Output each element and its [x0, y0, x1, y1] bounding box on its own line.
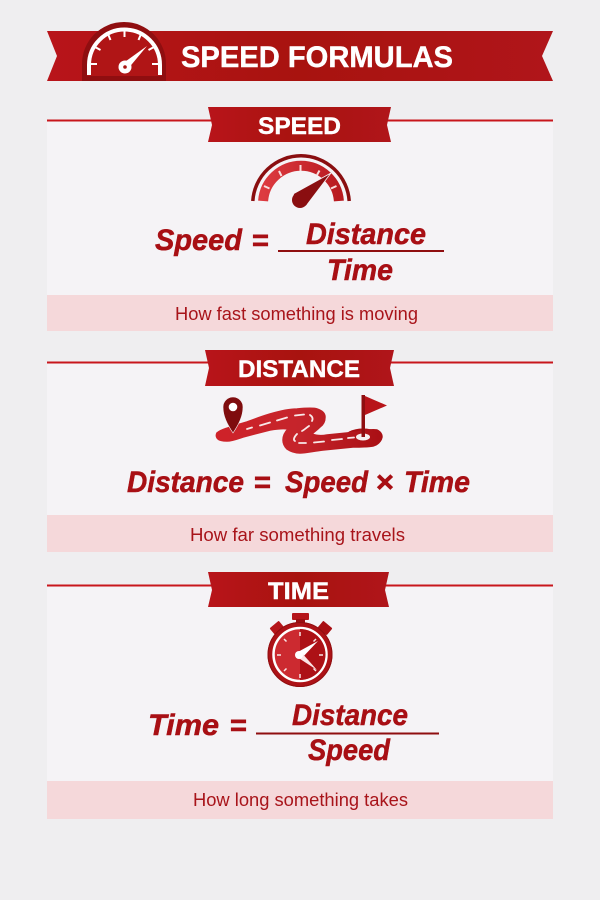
formula: time: Time [148, 709, 219, 742]
formula: time: Speed [308, 734, 391, 767]
formula: time: = [230, 709, 247, 742]
formula: speed: Distance [306, 218, 426, 251]
panel: time [47, 572, 553, 781]
heading: speed: SPEED [258, 113, 341, 140]
icon: winding road with pin and flag [216, 395, 387, 453]
formula: speed: Time [327, 254, 393, 287]
heading: distance: DISTANCE [238, 356, 360, 383]
formula: distance: = [254, 466, 271, 499]
caption: speed: How fast something is moving [175, 304, 418, 324]
formula: speed [155, 218, 444, 287]
caption: speed [47, 295, 553, 331]
heading: speed [208, 107, 391, 142]
caption: distance: How far something travels [190, 525, 405, 545]
formula: distance: Time [404, 466, 470, 499]
formula: speed: Speed [155, 224, 243, 257]
icon: speedometer [253, 156, 349, 208]
formula: speed: = [252, 224, 269, 257]
title: SPEED FORMULAS [181, 41, 453, 74]
heading: time [208, 572, 389, 607]
formula: distance: × [376, 466, 394, 499]
caption: time [47, 781, 553, 819]
panel: speed [47, 107, 553, 295]
formula: distance [127, 466, 470, 499]
formula: distance: Distance [127, 466, 244, 499]
icon: title speedometer [82, 22, 166, 81]
caption: distance [47, 515, 553, 552]
heading: distance [205, 350, 394, 386]
caption: time: How long something takes [193, 790, 408, 810]
panel: distance [47, 350, 553, 515]
formula: time: Distance [292, 699, 408, 732]
heading: time: TIME [268, 578, 329, 605]
formula: distance: Speed [285, 466, 369, 499]
title banner [47, 22, 553, 81]
icon: stopwatch [268, 613, 332, 687]
formula: time [148, 699, 439, 767]
